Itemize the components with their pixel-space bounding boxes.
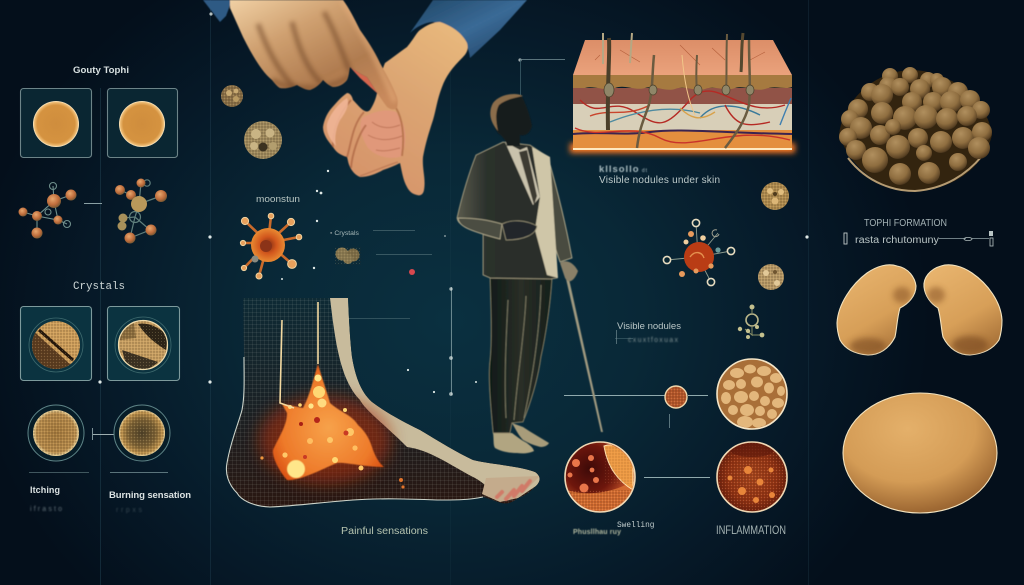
- red dermal layer: [573, 88, 792, 104]
- trousers: [489, 278, 552, 433]
- shirt and tie: [505, 142, 540, 205]
- forearm: [458, 218, 502, 239]
- box: left orb: [20, 88, 92, 158]
- tan epidermis: [573, 75, 792, 90]
- icon: orange virus left: [240, 213, 302, 279]
- label: INFLAMMATION: INFLAMMATION: [716, 525, 786, 537]
- label: garbled caption: kllsollo dt: [599, 164, 648, 175]
- label: nodules sub text: cxuxtfoxuax: [628, 337, 678, 344]
- shape: right kidney: [924, 265, 1002, 355]
- skin surface: [573, 40, 792, 75]
- icon: right molecule: [115, 178, 167, 244]
- inflamed glow: [259, 396, 391, 484]
- heading: Gouty Tophi: Gouty Tophi: [73, 65, 129, 76]
- palm hollow: [360, 110, 405, 158]
- finger shadows: [258, 0, 395, 102]
- grid lines and nodes: [29, 0, 809, 585]
- head: [491, 95, 532, 146]
- icon: nodules circle: [717, 359, 787, 429]
- trouser highlights: [505, 285, 541, 420]
- sleeve: right cuff: [410, 0, 527, 58]
- hand: pointing hand: [230, 0, 398, 109]
- icon: granular disc left: [28, 405, 84, 461]
- label: TOPHI FORMATION: TOPHI FORMATION: [864, 217, 947, 229]
- icon: small tophus ball 1: [221, 85, 243, 107]
- box: split crystal left: [20, 306, 92, 380]
- heading: Crystals: Crystals: [73, 281, 125, 293]
- cluster rim: [848, 156, 982, 191]
- hand: receiving hand: [323, 22, 468, 195]
- icon: small molecule: [738, 304, 764, 339]
- icon: small tophus ball right 2: [758, 264, 784, 290]
- right arm: [540, 157, 572, 262]
- blood vessels: [573, 91, 792, 143]
- heat streaks: [280, 302, 318, 408]
- cluster balls: [839, 67, 992, 185]
- label: rasta rchutomuny with connector: [844, 231, 993, 246]
- icon: small red disc: [665, 386, 687, 408]
- illustration: foot with glowing inflammation: [220, 295, 550, 510]
- arrow: molecule link: [84, 203, 102, 204]
- label: moonstun: moonstun: [256, 194, 300, 204]
- box: split crystal right: [108, 306, 180, 380]
- illustration: skin cross-section: [570, 33, 795, 153]
- illustration: hands: [203, 0, 527, 195]
- label: Visible nodules under skin: Visible nodules under skin: [599, 175, 720, 186]
- label: Swelling: Swelling: [617, 522, 655, 530]
- label: Crystals small: ▪ Crystals: [330, 230, 359, 237]
- sleeve: left cuff: [203, 0, 232, 22]
- jacket front panel: [532, 147, 558, 278]
- hand held out: [502, 221, 537, 240]
- fat band: [573, 130, 792, 149]
- label: swelling sub text: Phusllhau ruy: [573, 529, 621, 536]
- icon: left molecule: [18, 182, 76, 238]
- label: Visible nodules: Visible nodules: [617, 321, 682, 331]
- hairs and follicles: [603, 33, 750, 148]
- icon: small tophus ball right 1: [761, 182, 789, 210]
- panel: gouty tophi: [18, 65, 178, 244]
- cane: [564, 270, 603, 432]
- curled fingers: [333, 100, 366, 168]
- follicle bulbs: [604, 83, 754, 97]
- icon: small tophus ball 2: [244, 121, 282, 159]
- cluster base: [839, 70, 992, 191]
- icon: orange virus right: [663, 219, 735, 286]
- glow under skin block: [570, 143, 795, 153]
- thumb shadow and palm creases: [396, 108, 403, 156]
- shape: large oval nodule: [843, 393, 997, 513]
- label: burning sub text: rrpxs: [116, 507, 142, 514]
- illustration: standing man with cane: [457, 94, 603, 453]
- left foot: [493, 433, 534, 453]
- label: Itching: Itching: [30, 485, 60, 495]
- hair: [490, 94, 523, 131]
- icon: swelling circle: [565, 442, 636, 512]
- hot spots: [260, 374, 405, 489]
- icon: granular disc right: [114, 405, 170, 461]
- label: Painful sensations: Painful sensations: [341, 526, 428, 537]
- dot: pink marker: [409, 269, 415, 275]
- skin body: [573, 88, 792, 130]
- illustration: tophus cluster: [839, 67, 992, 191]
- foot silhouette: [220, 295, 550, 510]
- hand on cane: [560, 261, 578, 281]
- panel: crystals: [20, 281, 191, 514]
- cream skin band: [330, 298, 540, 500]
- tie: [519, 150, 537, 205]
- jacket: [457, 142, 557, 279]
- shape: left kidney: [837, 265, 916, 355]
- shadow under index finger: [350, 67, 378, 94]
- label: Burning sensation: Burning sensation: [109, 490, 191, 501]
- label: itching sub text: ifrasto: [30, 506, 62, 513]
- foot outline: [226, 357, 483, 507]
- box: right orb: [108, 88, 178, 158]
- right foot: [512, 423, 549, 447]
- icon: crystal cluster: [335, 247, 361, 265]
- label: rasta rchutomuny with connector: rasta rchutomuny: [855, 235, 939, 246]
- icon: inflammation circle: [717, 442, 787, 512]
